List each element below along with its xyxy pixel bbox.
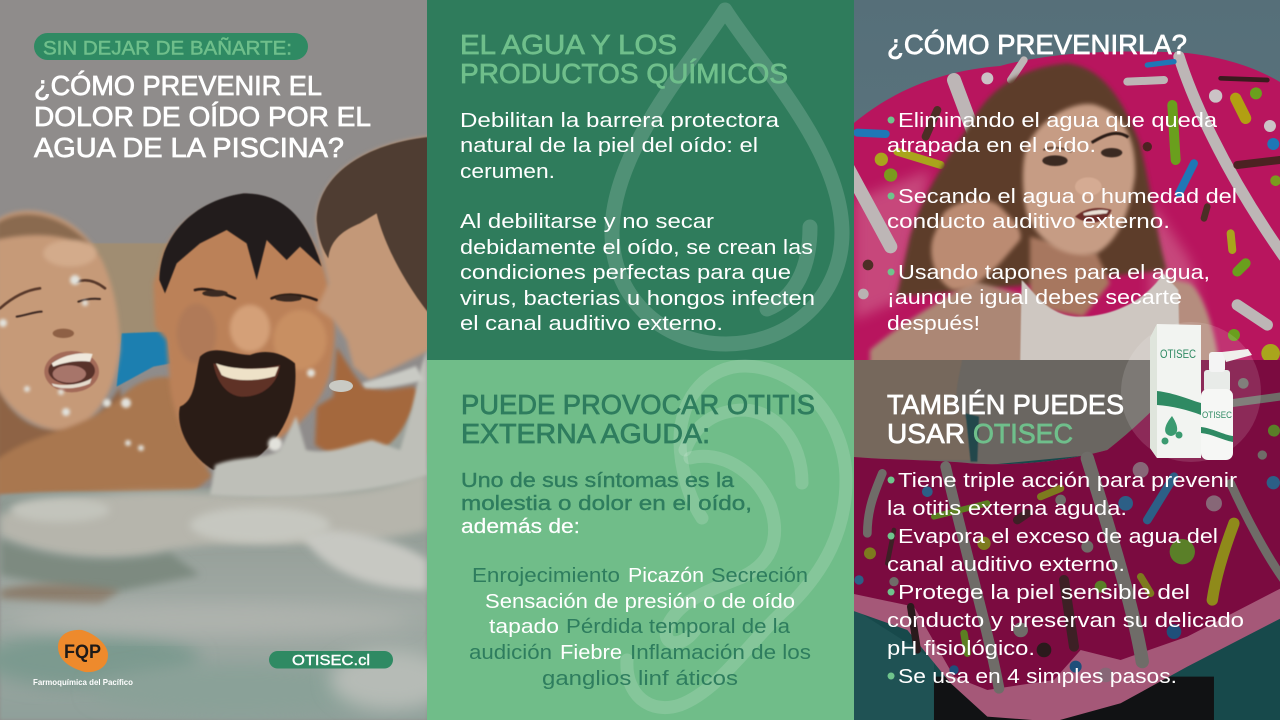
panel: family photo (0, 0, 450, 720)
icon: ear watermark (627, 366, 846, 708)
heading: El agua y los productos químicos (460, 29, 788, 89)
text block: main symptom: además de: (461, 515, 580, 538)
photo: shoulders and chest (867, 281, 1022, 360)
heading: main question (34, 70, 371, 163)
list: Otisec benefits: • (886, 464, 896, 494)
list: Otisec benefits (886, 464, 1244, 690)
list: prevention steps: • (886, 180, 896, 210)
list: symptoms: Pérdida temporal de la (566, 616, 791, 638)
photo: girl's face (1023, 104, 1135, 255)
list: prevention steps: ¡aunque igual debes secarte (887, 286, 1182, 309)
text block: main symptom (461, 469, 752, 538)
list: symptoms: Enrojecimiento (472, 565, 620, 587)
list: symptoms: Inflamación de los (630, 642, 811, 664)
list: Otisec benefits: canal auditivo externo. (887, 553, 1125, 576)
list: symptoms: ganglios linf áticos (542, 668, 738, 690)
photo: girl's neck (1030, 237, 1110, 317)
photo: arm and tank top (908, 360, 1150, 464)
heading: También puedes usar Otisec: TAMBIÉN PUEDES (887, 389, 1124, 420)
heading: Puede provocar otitis: EXTERNA AGUDA: (461, 418, 710, 449)
photo: dark swimwear (934, 677, 1214, 720)
list: prevention steps: después! (887, 312, 980, 335)
list: prevention steps: Eliminando el agua que queda (898, 109, 1218, 132)
panel: water and chemicals (427, 0, 854, 360)
photo: girl's hair (897, 63, 1167, 297)
heading: main question: DOLOR DE OÍDO POR EL (34, 101, 371, 132)
list: Otisec benefits: • (886, 576, 896, 606)
website pill: OTISEC.cl (269, 651, 393, 669)
product: spray bottle: OTISEC (1202, 410, 1232, 421)
panel: girl with donut float photo, upper (847, 0, 1280, 373)
logo: Farmoquímica del Pacífico: Farmoquímica del Pacífico (33, 677, 133, 687)
list: Otisec benefits: Se usa en 4 simples pasos. (898, 665, 1177, 688)
photo: donut float, upper part (854, 51, 1280, 370)
text block: chemical effects: Debilitan la barrera protectora (460, 109, 780, 132)
list: prevention steps: conducto auditivo externo. (887, 210, 1170, 233)
photo: donut float light rim (854, 412, 1280, 720)
panel: acute external otitis (427, 360, 854, 720)
text block: main symptom: Uno de sus síntomas es la (461, 469, 735, 492)
title pill: SIN DEJAR DE BAÑARTE: SIN DEJAR DE BAÑARTE: (43, 36, 292, 60)
list: prevention steps: • (886, 104, 896, 134)
list: Otisec benefits: Protege la piel sensible del (898, 581, 1190, 604)
photo: father (153, 200, 335, 467)
photo: donut float icing (851, 347, 1280, 690)
heading: El agua y los productos químicos: EL AGUA Y LOS (460, 29, 677, 60)
heading: Puede provocar otitis: PUEDE PROVOCAR OTITIS (461, 389, 815, 420)
list: symptoms: Sensación de presión o de oído (485, 591, 795, 613)
logo: Farmoquímica del Pacífico: FQP (64, 642, 101, 663)
list: symptoms: Picazón (628, 565, 704, 587)
list: prevention steps: • (886, 256, 896, 286)
photo: white tank top (1020, 273, 1180, 360)
heading: main question: ¿CÓMO PREVENIR EL (34, 70, 322, 101)
photo: girl's smile and eyes (0, 280, 105, 392)
website pill: OTISEC.cl: OTISEC.cl (292, 652, 370, 669)
text block: chemical effects (460, 109, 815, 335)
text block: chemical effects: virus, bacterias u hongos infecten (460, 287, 815, 310)
photo: icing stripes and sprinkles, lower (854, 378, 1280, 688)
heading: También puedes usar Otisec (887, 389, 1124, 449)
text block: chemical effects: cerumen. (460, 160, 555, 183)
photo: splashing water (0, 275, 450, 720)
list: Otisec benefits: • (886, 520, 896, 550)
list: Otisec benefits: Tiene triple acción para prevenir (898, 469, 1237, 492)
photo: child on the right (317, 137, 430, 380)
text block: chemical effects: debidamente el oído, se crean las (460, 236, 813, 259)
text block: chemical effects: natural de la piel del oído: el (460, 134, 758, 157)
text block: chemical effects: Al debilitarse y no secar (460, 210, 714, 233)
text block: chemical effects: el canal auditivo externo. (460, 312, 723, 335)
photo: hand and arm on the right (315, 347, 430, 460)
photo: hand raised to ear (931, 200, 1021, 290)
list: Otisec benefits: Evapora el exceso de agua del (898, 525, 1218, 548)
photo: lighter pink highlights on float (854, 168, 1203, 322)
list: Otisec benefits: conducto y preservan su delicado (887, 609, 1244, 632)
icon: water drop watermark (612, 10, 842, 344)
list: symptoms: Fiebre (560, 642, 622, 664)
heading: También puedes usar Otisec: OTISEC (973, 418, 1073, 449)
photo: teal background, lower left (851, 607, 934, 720)
logo: Farmoquímica del Pacífico (33, 630, 133, 687)
heading: Puede provocar otitis (461, 389, 815, 449)
photo: girl on the left (0, 211, 212, 495)
list: prevention steps: Secando el agua o humedad del (898, 185, 1237, 208)
photo: icing stripes and sprinkles, upper (847, 57, 1280, 363)
photo: girl's eyes and mouth (1042, 133, 1128, 222)
list: symptoms (469, 565, 811, 690)
text block: chemical effects: condiciones perfectas para que (460, 261, 791, 284)
heading: main question: AGUA DE LA PISCINA? (34, 132, 344, 163)
list: prevention steps (886, 104, 1237, 335)
list: Otisec benefits: pH fisiológico. (887, 637, 1035, 660)
heading: También puedes usar Otisec: USAR (887, 418, 965, 449)
heading: El agua y los productos químicos: PRODUCTOS QUÍMICOS (460, 58, 788, 89)
product: Otisec box and spray bottle (1121, 322, 1261, 462)
product: box: OTISEC (1160, 349, 1196, 361)
list: symptoms: tapado (489, 616, 559, 638)
heading: Cómo prevenirla: ¿CÓMO PREVENIRLA? (887, 29, 1187, 60)
list: prevention steps: Usando tapones para el agua, (898, 261, 1210, 284)
list: symptoms: audición (469, 642, 552, 664)
list: Otisec benefits: la otitis externa aguda. (887, 497, 1127, 520)
list: prevention steps: atrapada en el oído. (887, 134, 1096, 157)
panel: girl with donut float photo, lower (851, 347, 1280, 720)
text block: main symptom: molestia o dolor en el oído, (461, 492, 752, 515)
list: Otisec benefits: • (886, 660, 896, 690)
list: symptoms: Secreción (711, 565, 808, 587)
